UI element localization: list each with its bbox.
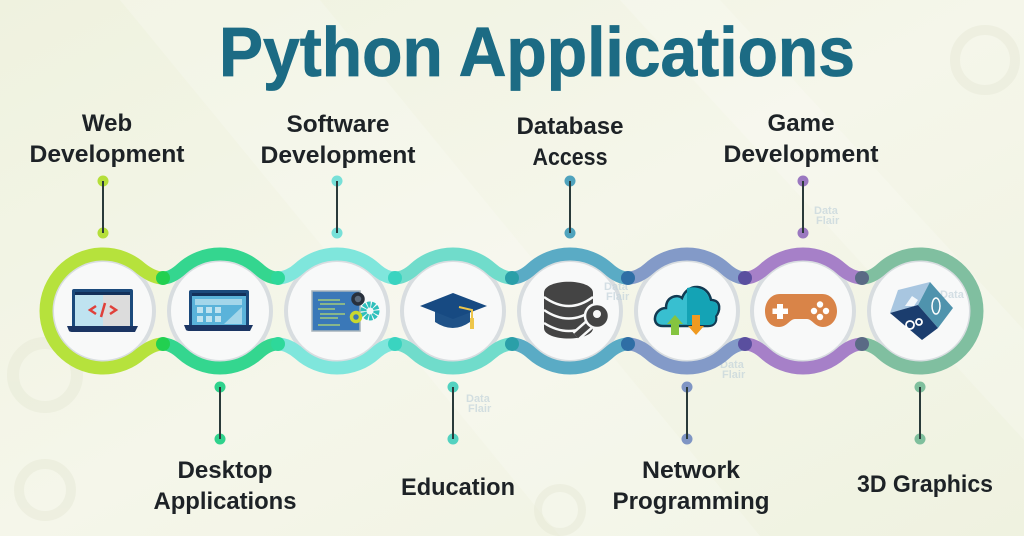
icon: laptop code: [67, 289, 138, 332]
connector: education: [448, 382, 458, 444]
connector: database: [564, 176, 576, 238]
label: Game Development: Development: [724, 141, 879, 168]
connector: web: [98, 176, 108, 238]
label: Game Development: Game: [768, 110, 834, 137]
connector: 3d: [914, 382, 926, 444]
watermarks: Flair: [816, 215, 840, 227]
connector: desktop: [214, 382, 226, 444]
watermarks: Data: [720, 359, 745, 371]
icon: laptop window: [184, 290, 253, 331]
label: Game Development: [724, 110, 879, 168]
label: Software Development: Development: [260, 142, 416, 169]
label: Network Programming: Network: [642, 457, 741, 484]
connector: software: [332, 176, 342, 238]
icon: 3D cube: [890, 282, 953, 340]
watermarks: Flair: [722, 369, 746, 381]
title: Python Applications: [219, 13, 855, 91]
label: Web Development: Web: [82, 110, 132, 137]
label: Software Development: Software: [286, 111, 390, 138]
label: 3D Graphics: 3D Graphics: [857, 471, 993, 498]
label: Database Access: Access: [532, 144, 608, 171]
label: Network Programming: [612, 457, 770, 515]
label: Education: Education: [401, 474, 515, 501]
connector: network: [682, 382, 692, 444]
watermarks: Flair: [468, 403, 492, 415]
label: Web Development: [30, 110, 185, 168]
icon: database with key: [544, 282, 609, 338]
label: Web Development: Development: [30, 141, 185, 168]
icon: code window with gears: [312, 291, 376, 331]
icon: cloud with arrows: [655, 287, 719, 335]
watermarks: [466, 205, 965, 415]
watermarks: Flair: [606, 291, 630, 303]
icon: game controller: [765, 294, 837, 327]
label: Desktop Applications: [154, 457, 296, 515]
label: Database Access: Database: [516, 113, 624, 140]
label: Software Development: [260, 111, 416, 169]
label: Desktop Applications: Applications: [154, 488, 296, 515]
icon: graduation cap: [420, 293, 487, 329]
label: Desktop Applications: Desktop: [178, 457, 272, 484]
watermarks: Data: [604, 281, 629, 293]
watermarks: Data: [814, 205, 839, 217]
ribbon: chain of coloured waves: [46, 254, 977, 368]
ribbon nodes: [156, 271, 869, 351]
watermarks: Data: [940, 289, 965, 301]
white circles: [52, 260, 971, 362]
label: Database Access: [516, 113, 624, 171]
label: Network Programming: Programming: [612, 488, 770, 515]
connector: game: [798, 176, 808, 238]
watermarks: Data: [466, 393, 491, 405]
